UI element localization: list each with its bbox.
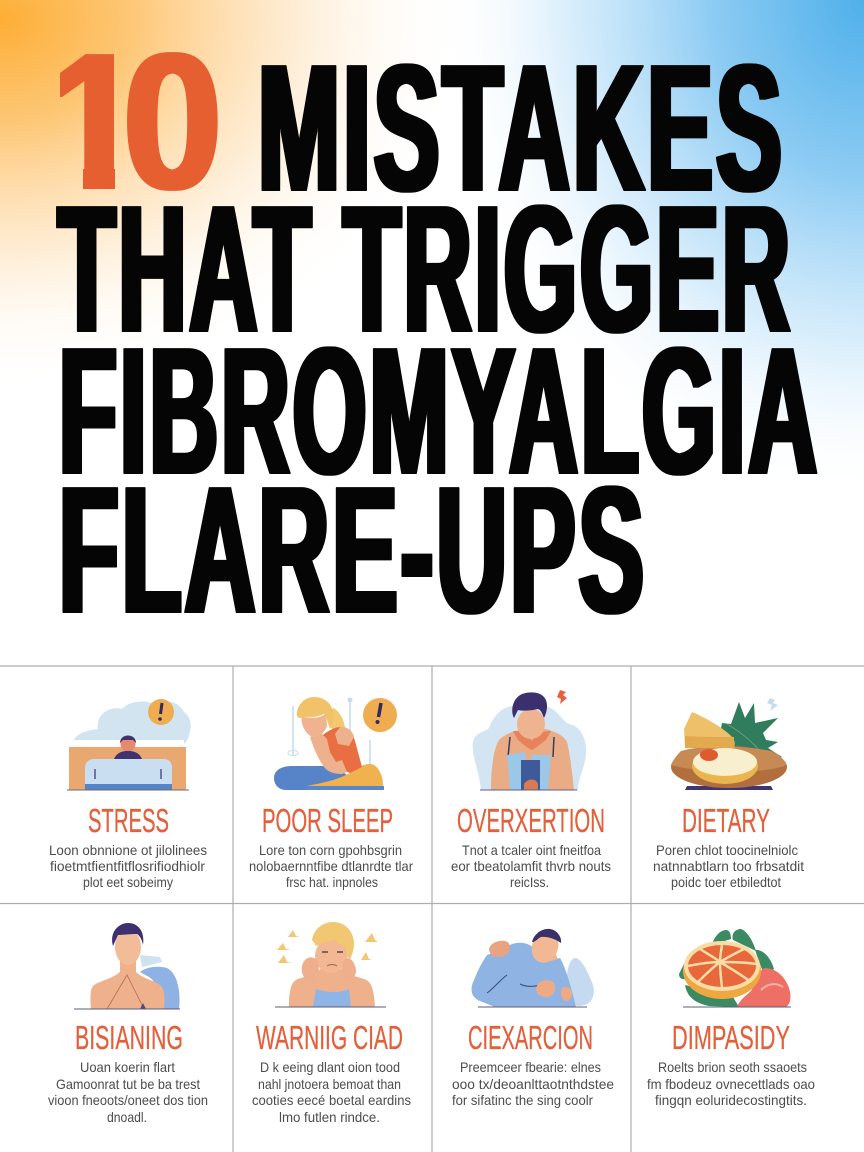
icon: woman with water wave	[74, 923, 180, 1009]
description: bisianing: Uoan koerin flart	[80, 1059, 175, 1075]
description: stress	[49, 842, 207, 890]
description: overexertion	[451, 842, 611, 890]
panel: overexertion	[451, 690, 611, 890]
description: dimpasidy: fingqn eoluridecostingtits.	[655, 1092, 807, 1108]
description: ciexarcion: ooo tx/deoanlttaotnthdstee	[452, 1076, 614, 1092]
header gradient background	[0, 0, 864, 520]
heading: ciexarcion: CIEXARCION	[468, 1019, 593, 1056]
description: bisianing: dnoadl.	[107, 1109, 147, 1125]
title number 10: 0	[123, 12, 222, 231]
description: dimpasidy: Roelts brion seoth ssaoets	[658, 1059, 807, 1075]
description: dietary	[653, 842, 804, 890]
icon: person in bed with alert	[67, 699, 191, 790]
description: dietary: poidc toer etbiledtot	[671, 874, 781, 890]
description: warning cue	[252, 1059, 411, 1125]
icon: plate of food with leaves	[671, 698, 787, 790]
description: poor sleep: nolobaernntfibe dtlanrdte tlar	[249, 858, 413, 874]
description: bisianing	[48, 1059, 208, 1125]
panel: dimpasidy	[647, 929, 815, 1108]
heading: dietary: DIETARY	[682, 802, 770, 839]
title number 10	[60, 52, 218, 191]
panel: stress	[49, 699, 207, 890]
panel: ciexarcion	[452, 928, 614, 1108]
heading: dimpasidy: DIMPASIDY	[672, 1019, 790, 1056]
description: poor sleep: frsc hat. inpnoles	[286, 874, 378, 890]
description: warning cue: cooties eecé boetal eardins	[252, 1092, 411, 1108]
description: stress: Loon obnnione ot jilolinees	[49, 842, 207, 858]
description: ciexarcion	[452, 1059, 614, 1108]
icon: man in blue sweater	[472, 928, 594, 1007]
panel: bisianing	[48, 923, 208, 1125]
icon: woman holding shoulder with alert	[274, 697, 397, 790]
description: stress: plot eet sobeimy	[83, 874, 173, 890]
description: warning cue: lmo futlen rindce.	[279, 1109, 380, 1125]
icon: worried blonde woman	[275, 922, 386, 1007]
icon: grapefruit with leaves and meat	[679, 929, 791, 1007]
panel: warning cue	[252, 922, 411, 1125]
panel: dietary	[653, 698, 804, 890]
description: poor sleep	[249, 842, 413, 890]
heading: poor sleep: POOR SLEEP	[262, 802, 393, 839]
description: dietary: natnnabtlarn too frbsatdit	[653, 858, 804, 874]
description: overexertion: eor tbeatolamfit thvrb nouts	[451, 858, 611, 874]
description: warning cue: D k eeing dlant oion tood	[260, 1059, 400, 1075]
description: dietary: Poren chlot toocinelniolc	[656, 842, 798, 858]
description: stress: fioetmtfientfitflosrifiodhiolr	[50, 858, 205, 874]
description: poor sleep: Lore ton corn gpohbsgrin	[259, 842, 402, 858]
heading: warning cue: WARNIIG CIAD	[256, 1019, 403, 1056]
description: bisianing: Gamoonrat tut be ba trest	[56, 1076, 200, 1092]
heading: overexertion: OVERXERTION	[457, 802, 605, 839]
heading: bisianing: BISIANING	[75, 1019, 183, 1056]
description: ciexarcion: Preemceer fbearie: elnes	[460, 1059, 601, 1075]
title number 10: 1	[47, 12, 143, 231]
description: warning cue: nahl jnotoera bemoat than	[258, 1076, 401, 1092]
description: bisianing: vioon fneoots/oneet dos tion	[48, 1092, 208, 1108]
title	[56, 52, 818, 615]
description: overexertion: reicIss.	[510, 874, 549, 890]
icon: exhausted person with dark hair	[473, 690, 586, 790]
heading: stress: STRESS	[88, 802, 169, 839]
description: dimpasidy: fm fbodeuz ovnecettlads oao	[647, 1076, 815, 1092]
description: dimpasidy	[647, 1059, 815, 1108]
description: ciexarcion: for sifatinc the sing coolr	[452, 1092, 593, 1108]
panel: poor sleep	[249, 697, 413, 890]
description: overexertion: Tnot a tcaler oint fneitfoa	[462, 842, 601, 858]
